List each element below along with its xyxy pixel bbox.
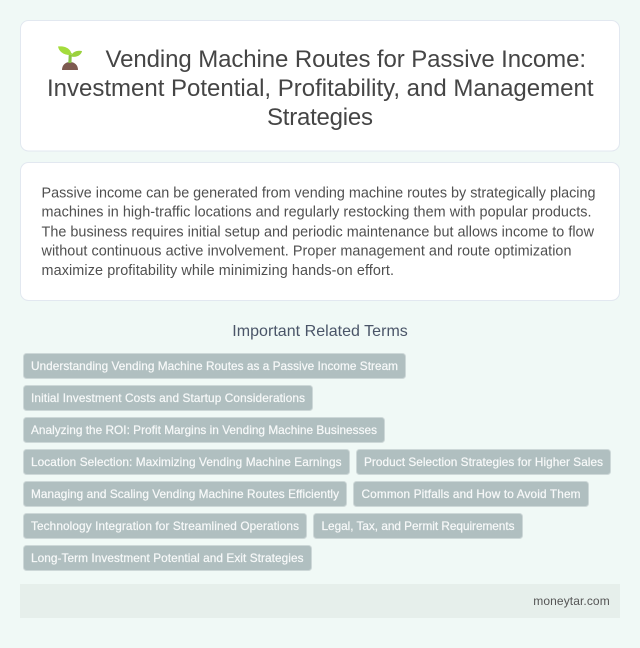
title text: Strategies [267,104,373,131]
tag: Legal, Tax, and Permit Requirements [322,519,515,533]
tag: Product Selection Strategies for Higher Sales [364,455,603,469]
tag [24,354,406,378]
tag: Analyzing the ROI: Profit Margins in Vending Machine Businesses [31,423,377,437]
tag [24,450,350,474]
title text [47,46,594,131]
tag [24,418,384,442]
description text: without continuous active involvement. Proper management and route optimization [40,244,572,260]
description text [40,186,596,279]
description text: maximize profitability while minimizing hands-on effort. [42,263,394,279]
heading: important related terms: Important Related Terms [232,323,408,340]
footer: moneytar.com [533,594,610,608]
tag: Understanding Vending Machine Routes as a Passive Income Stream [31,359,398,373]
tag list [24,354,610,570]
tag: Technology Integration for Streamlined Operations [31,519,299,533]
tag [356,450,610,474]
tag: Long-Term Investment Potential and Exit Strategies [31,551,304,565]
tag [354,482,588,506]
tag: Location Selection: Maximizing Vending Machine Earnings [31,455,342,469]
description text: machines in high-traffic locations and regularly restocking them with popular products. [42,204,592,220]
tag [24,546,312,570]
description text: Passive income can be generated from vending machine routes by strategically placing [42,186,596,202]
description text: The business requires initial setup and periodic maintenance but allows income to flow [42,224,595,240]
panel: description [20,162,620,300]
title text: Investment Potential, Profitability, and Management [47,75,594,102]
tag [314,514,522,538]
icon: seedling [58,46,82,70]
panel: title [20,20,620,151]
tag [24,514,306,538]
tag [24,482,346,506]
tag: Initial Investment Costs and Startup Considerations [31,391,305,405]
tag: Managing and Scaling Vending Machine Routes Efficiently [31,487,339,501]
tag [24,386,312,410]
tag: Common Pitfalls and How to Avoid Them [362,487,581,501]
footer [20,584,620,618]
title text: Vending Machine Routes for Passive Income: [106,46,586,73]
